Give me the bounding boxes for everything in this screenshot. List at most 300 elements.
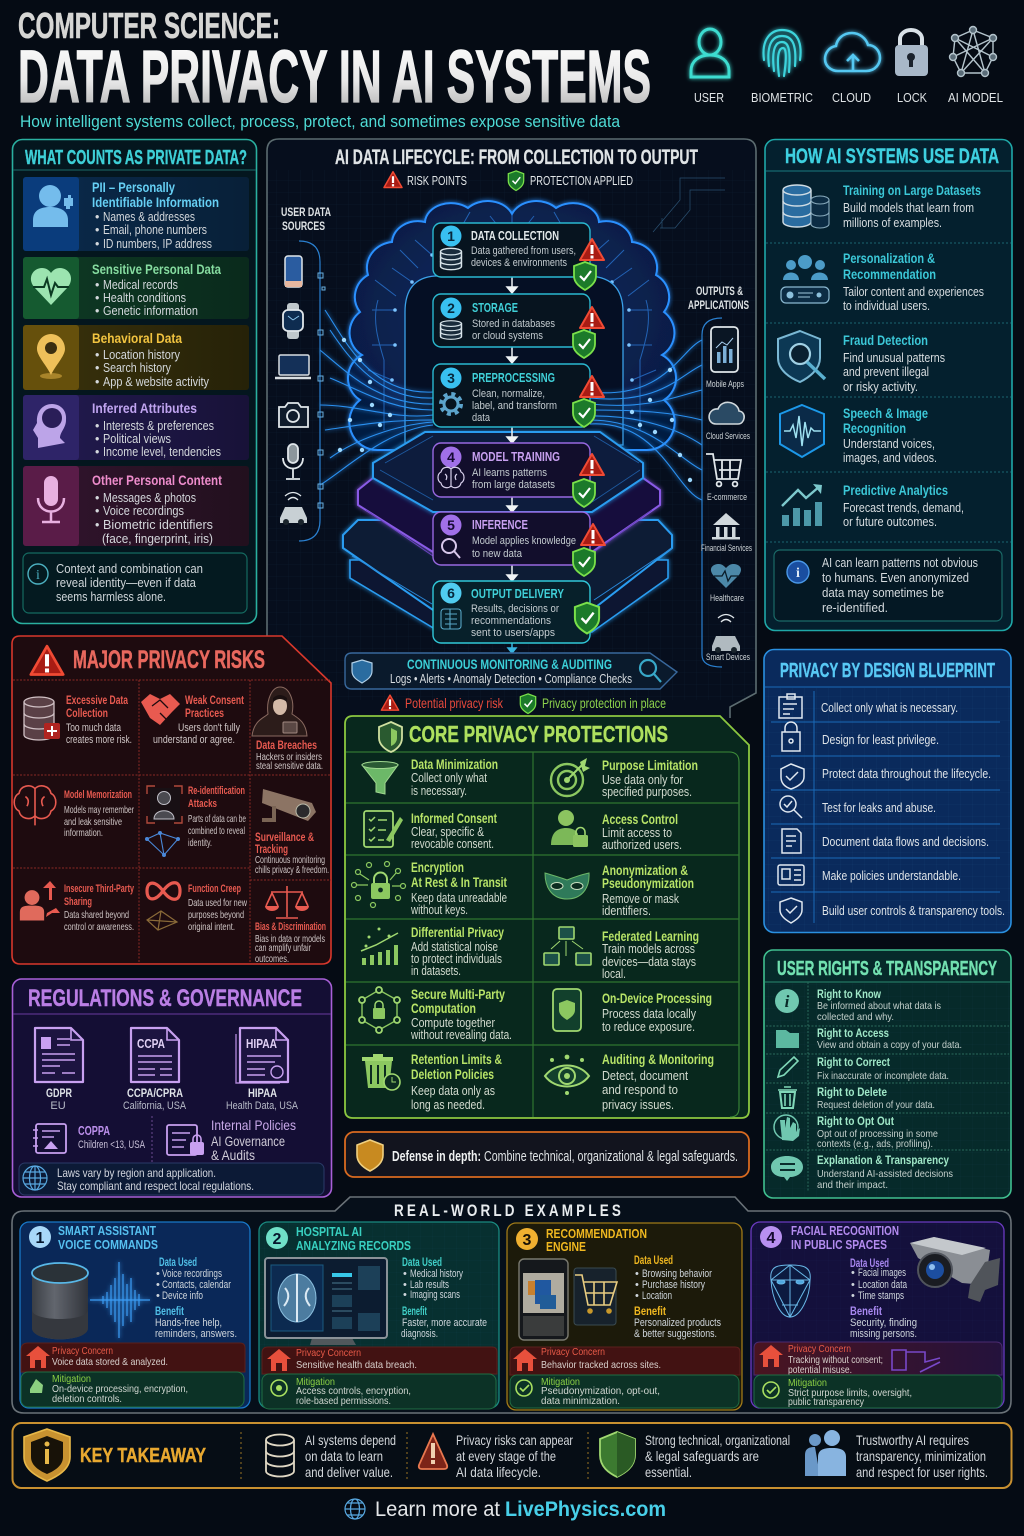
- step 3: preprocessing: [433, 364, 604, 427]
- callout: context and combination: [23, 553, 247, 613]
- card 4: facial recognition: 4: [767, 1230, 776, 1247]
- card 3: recommendation engine: RECOMMENDATION: [546, 1226, 647, 1241]
- row: PII: Identifiable Information: [92, 194, 219, 210]
- note: laws vary by region: [19, 1163, 324, 1195]
- cell: re-identification attacks: identity.: [188, 837, 212, 849]
- cell: function creep: [147, 883, 247, 933]
- card 1: smart assistant: VOICE COMMANDS: [58, 1237, 158, 1252]
- icon: microphone: [283, 444, 303, 479]
- takeaway: data: [266, 1432, 396, 1480]
- card 4: facial recognition: [751, 1222, 1004, 1408]
- step 2: storage: Stored in databases: [472, 318, 555, 330]
- row: PII: Names & addresses: [103, 210, 195, 224]
- callout: AI can learn patterns: AI can learn patterns not obvious: [822, 555, 978, 570]
- mitigation: Mitigation: [52, 1374, 91, 1385]
- concern: Privacy Concern: [788, 1344, 851, 1355]
- icon: financial services: [712, 513, 740, 540]
- chart: brain and server stack illustration: [320, 178, 725, 632]
- concern: [262, 1347, 497, 1374]
- item: predictive analytics: Predictive Analytics: [843, 483, 948, 498]
- panel: how AI systems use data: [765, 140, 1012, 630]
- step 2: storage: or cloud systems: [472, 330, 543, 342]
- item: on-device processing: [553, 989, 712, 1034]
- icon: microphone: [38, 476, 64, 522]
- note: laws vary by region: Stay compliant and respect local regulations.: [57, 1179, 254, 1193]
- row: other personal content: Biometric identifiers: [103, 518, 213, 532]
- row: PII: •: [95, 223, 99, 237]
- note: laws vary by region: Laws vary by region and application.: [57, 1166, 216, 1180]
- row: PII: ID numbers, IP address: [103, 237, 212, 251]
- card 2: hospital AI: [259, 1222, 499, 1409]
- icon: watch: [283, 303, 303, 339]
- row: behavioral data: Behavioral Data: [92, 330, 182, 346]
- right to delete: [778, 1085, 935, 1111]
- item: secure multi-party computation: [359, 987, 512, 1042]
- mitigation: Mitigation: [296, 1377, 335, 1388]
- row: behavioral data: Location history: [103, 348, 181, 362]
- card 1: smart assistant: Benefit: [155, 1304, 184, 1318]
- panel: AI data lifecycle: [267, 139, 756, 720]
- circuit traces top right: [653, 178, 725, 232]
- item: fraud detection: and prevent illegal: [843, 365, 929, 379]
- card 1: smart assistant: Contacts, calendar: [162, 1279, 231, 1291]
- callout: context and combination: seems harmless alone.: [56, 589, 166, 604]
- takeaway: risk: AI data lifecycle.: [456, 1464, 541, 1480]
- row: behavioral data: •: [95, 375, 99, 389]
- cell: insecure third-party sharing: Sharing: [64, 896, 92, 908]
- outputs and applications column: E-commerce: [707, 492, 747, 502]
- item: encryption: [352, 860, 507, 917]
- card 4: facial recognition: Security, finding: [850, 1317, 917, 1329]
- step 4: model training: 4: [447, 449, 455, 465]
- icon labels: CLOUD: [832, 90, 871, 105]
- callout: AI can learn patterns: re-identified.: [822, 600, 888, 615]
- step 6: output delivery: 6: [447, 585, 455, 601]
- icon labels: BIOMETRIC: [751, 90, 813, 105]
- takeaway: safeguards: [600, 1432, 790, 1480]
- card 3: recommendation engine: Purchase history: [642, 1279, 705, 1291]
- item: fraud detection: or risky activity.: [843, 380, 918, 394]
- blueprint list: Test for leaks and abuse.: [822, 800, 936, 815]
- outputs and applications column: Cloud Services: [706, 431, 750, 441]
- heading: REAL-WORLD EXAMPLES: [394, 1201, 624, 1220]
- row: behavioral data: •: [95, 348, 99, 362]
- takeaway: data: AI systems depend: [305, 1432, 396, 1448]
- icon: camera: [279, 403, 308, 427]
- outputs and applications column: Healthcare: [710, 593, 744, 603]
- legend: potential risk and protection: Privacy protection in place: [542, 695, 666, 711]
- card 2: hospital AI: •: [403, 1268, 407, 1280]
- cell: surveillance and tracking: Surveillance &: [255, 832, 314, 844]
- cell: excessive data collection: Collection: [66, 708, 108, 720]
- legend: potential risk and protection: [381, 694, 666, 714]
- icon: lock: [895, 30, 928, 76]
- explanation and transparency: and their impact.: [817, 1179, 888, 1191]
- header title block: [18, 5, 651, 131]
- step 2: storage: STORAGE: [472, 300, 518, 315]
- icon: biometric: [763, 30, 801, 76]
- card 4: facial recognition: FACIAL RECOGNITION: [791, 1223, 899, 1238]
- right to delete: Right to Delete: [817, 1085, 887, 1099]
- card 3: recommendation engine: Benefit: [634, 1304, 666, 1318]
- heading: KEY TAKEAWAY: [80, 1445, 207, 1467]
- item: speech and image recognition: images, and videos.: [843, 451, 937, 465]
- data wires right: [590, 340, 702, 500]
- callout: context and combination: i: [36, 568, 40, 583]
- icon: warning: [31, 646, 63, 674]
- item: purpose limitation: specified purposes.: [602, 785, 692, 799]
- item: speech and image recognition: Recognition: [843, 421, 906, 436]
- callout: AI can learn patterns: data may sometimes be: [822, 585, 944, 600]
- outputs and applications column: Financial Services: [701, 543, 752, 553]
- row: sensitive personal data: [23, 257, 249, 319]
- concern: Behavior tracked across sites.: [541, 1359, 661, 1371]
- item: secure multi-party computation: Compute together: [411, 1016, 495, 1030]
- row: other personal content: •: [95, 491, 99, 505]
- step 4: model training: [433, 443, 604, 507]
- data points: [338, 338, 692, 482]
- icon: smart speaker: [32, 1263, 88, 1339]
- step 5: inference: [433, 512, 605, 576]
- right to know: [775, 987, 941, 1023]
- card 3: recommendation engine: •: [635, 1268, 639, 1280]
- blueprint list: Document data flows and decisions.: [822, 834, 989, 849]
- takeaway: safeguards: essential.: [645, 1464, 692, 1480]
- card 1: smart assistant: reminders, answers.: [155, 1328, 237, 1340]
- outputs and applications column: Smart Devices: [706, 652, 750, 662]
- icon: healthcare: [711, 564, 741, 588]
- data wires left: [320, 310, 433, 485]
- inner brain folds: [368, 212, 656, 430]
- item: secure multi-party computation: Secure Multi-Party: [411, 987, 505, 1002]
- item: access control: [551, 810, 682, 852]
- internal policies: Internal Policies: [211, 1117, 296, 1133]
- banner: continuous monitoring: Logs • Alerts • Anomaly Detection • Compliance Checks: [390, 672, 632, 686]
- cell: bias and discrimination: [255, 886, 326, 965]
- card 1: smart assistant: SMART ASSISTANT: [58, 1223, 156, 1238]
- icon: phone and cart: [519, 1259, 617, 1340]
- cell: data breaches: [252, 687, 323, 772]
- row: inferred attributes: •: [95, 432, 99, 446]
- cell: excessive data collection: creates more risk.: [66, 734, 132, 746]
- footer: learn more: Learn more at: [375, 1498, 500, 1521]
- banner: continuous monitoring: [345, 653, 677, 689]
- regulation: GDPR: GDPR: [46, 1086, 72, 1100]
- callout: AI can learn patterns: to humans. Even anonymized: [822, 570, 969, 585]
- cell: data breaches: Hackers or insiders: [256, 752, 322, 763]
- icon: heart: [31, 268, 71, 305]
- right to know: Be informed about what data is: [817, 1000, 941, 1012]
- cell: insecure third-party sharing: Data shared beyond: [64, 909, 129, 921]
- card 3: recommendation engine: Location: [642, 1290, 672, 1302]
- cell: bias and discrimination: Bias & Discrimination: [255, 921, 326, 933]
- mitigation: Mitigation: [788, 1378, 827, 1389]
- panel: core privacy protections: [345, 716, 749, 1118]
- item: training: Training on Large Datasets: [843, 183, 981, 198]
- cell: bias and discrimination: Bias in data or models: [255, 934, 325, 945]
- regulation: CCPA: CCPA: [137, 1036, 165, 1051]
- item: speech and image recognition: Speech & Image: [843, 406, 928, 421]
- callout: context and combination: reveal identity—even if data: [56, 575, 197, 590]
- item: anonymization: Anonymization &: [602, 863, 688, 878]
- card 1: smart assistant: Hands-free help,: [155, 1317, 222, 1329]
- heading: CORE PRIVACY PROTECTIONS: [409, 721, 668, 747]
- card 4: facial recognition: •: [851, 1290, 855, 1302]
- item: informed consent: [364, 811, 497, 851]
- server layer top: [373, 432, 643, 512]
- row: inferred attributes: •: [95, 419, 99, 433]
- heading: WHAT COUNTS AS PRIVATE DATA?: [25, 147, 247, 169]
- row: behavioral data: •: [95, 361, 99, 375]
- cell: surveillance and tracking: [255, 789, 329, 876]
- row: PII: [23, 177, 249, 251]
- step 3: preprocessing: label, and transform: [472, 400, 557, 412]
- callout: AI can learn patterns: i: [796, 566, 800, 581]
- item: purpose limitation: [551, 758, 698, 799]
- row: behavioral data: App & website activity: [103, 375, 210, 389]
- icon: smart devices: [712, 614, 740, 653]
- card 3: recommendation engine: Data Used: [634, 1253, 673, 1267]
- regulation: HIPAA: HIPAA: [248, 1086, 277, 1100]
- item: fraud detection: Find unusual patterns: [843, 351, 945, 365]
- row: PII: •: [95, 237, 99, 251]
- item: training: [783, 183, 981, 230]
- item: access control: Limit access to: [602, 826, 672, 840]
- footer: learn more: LivePhysics.com: [505, 1498, 666, 1521]
- takeaway: safeguards: Strong technical, organizational: [645, 1432, 790, 1448]
- item: encryption: without keys.: [410, 903, 468, 917]
- card 1: smart assistant: [20, 1222, 250, 1408]
- icon: mobile apps: [711, 327, 738, 372]
- step 1: data collection: devices & environments: [471, 257, 567, 269]
- item: federated learning: devices—data stays: [602, 955, 696, 969]
- cell: bias and discrimination: outcomes.: [255, 954, 289, 965]
- row: other personal content: Other Personal Content: [92, 472, 222, 488]
- panel: what counts as private data: [12, 140, 256, 624]
- item: anonymization: identifiers.: [602, 904, 651, 918]
- row: inferred attributes: •: [95, 445, 99, 459]
- card 1: smart assistant: 1: [36, 1230, 45, 1247]
- item: personalization: to individual users.: [843, 299, 930, 313]
- item: purpose limitation: Use data only for: [602, 773, 683, 787]
- mitigation: Access controls, encryption,: [296, 1386, 411, 1397]
- right to opt out: contexts (e.g., ads, profiling).: [817, 1138, 933, 1150]
- item: data minimization: [362, 757, 498, 798]
- cell: model memorization: Model Memorization: [64, 789, 132, 801]
- card 3: recommendation engine: •: [635, 1290, 639, 1302]
- right to opt out: Right to Opt Out: [817, 1114, 894, 1128]
- takeaway: risk: Privacy risks can appear: [456, 1432, 573, 1448]
- row: inferred attributes: [23, 395, 249, 460]
- outputs and applications column: APPLICATIONS: [688, 298, 749, 312]
- regulation: HIPAA: Health Data, USA: [226, 1100, 299, 1112]
- callout: AI can learn patterns: [774, 550, 1002, 621]
- row: sensitive personal data: Medical records: [103, 278, 178, 292]
- item: differential privacy: Differential Privacy: [411, 925, 504, 940]
- subtitle: How intelligent systems collect, process, protect, and sometimes expose sensitive data: [20, 112, 620, 131]
- row: inferred attributes: Interests & preferences: [103, 419, 214, 433]
- callout: context and combination: Context and combination can: [56, 561, 203, 576]
- cell: excessive data collection: Too much data: [66, 722, 122, 734]
- banner: defense in depth: [345, 1132, 749, 1177]
- icon: head with brain: [33, 404, 66, 448]
- icon: location pin: [37, 334, 65, 379]
- item: on-device processing: On-Device Processing: [602, 991, 712, 1006]
- heading: AI DATA LIFECYCLE: FROM COLLECTION TO OUTPUT: [335, 146, 698, 169]
- icon: face mesh: [771, 1265, 810, 1317]
- blueprint list: Make policies understandable.: [822, 868, 961, 883]
- cell: re-identification attacks: Re-identification: [188, 785, 245, 797]
- step 5: inference: Model applies knowledge: [472, 535, 576, 547]
- right to delete: Request deletion of your data.: [817, 1099, 935, 1111]
- step 2: storage: [433, 294, 604, 358]
- row: other personal content: Messages & photos: [103, 491, 196, 505]
- cell: function creep: Function Creep: [188, 883, 241, 895]
- panel: real-world examples: [12, 1197, 1011, 1413]
- card 3: recommendation engine: & better suggestions.: [634, 1328, 717, 1340]
- icon: connected car: [280, 492, 307, 525]
- item: purpose limitation: Purpose Limitation: [602, 758, 698, 773]
- cell: weak consent: understand or agree.: [153, 734, 235, 746]
- item: retention limits: [362, 1052, 502, 1112]
- item: informed consent: revocable consent.: [411, 837, 494, 851]
- mitigation: [754, 1375, 1002, 1408]
- step 2: storage: 2: [447, 300, 455, 316]
- concern: Privacy Concern: [296, 1347, 361, 1359]
- right to know: Right to Know: [817, 987, 882, 1001]
- legend: risk and protection: RISK POINTS: [407, 174, 467, 188]
- concern: [21, 1343, 245, 1372]
- item: predictive analytics: [782, 483, 964, 529]
- item: predictive analytics: or future outcomes.: [843, 515, 937, 529]
- row: inferred attributes: Income level, tendencies: [103, 445, 221, 459]
- icon labels: [694, 90, 1003, 105]
- item: on-device processing: to reduce exposure.: [602, 1020, 695, 1034]
- banner: defense in depth: Combine technical, organizational & legal safeguards.: [484, 1148, 738, 1165]
- concern: [754, 1342, 1002, 1376]
- card 2: hospital AI: Medical history: [410, 1268, 463, 1280]
- step 3: preprocessing: Clean, normalize,: [472, 388, 545, 400]
- cell: weak consent: Weak Consent: [185, 695, 244, 707]
- mitigation: Strict purpose limits, oversight,: [788, 1388, 912, 1399]
- mitigation: [510, 1375, 739, 1408]
- concern: Voice data stored & analyzed.: [52, 1356, 168, 1368]
- row: other personal content: •: [95, 518, 99, 532]
- takeaway: trust: transparency, minimization: [856, 1448, 986, 1464]
- card 1: smart assistant: Device info: [162, 1290, 203, 1302]
- item: federated learning: Train models across: [602, 942, 695, 956]
- cell: model memorization: Models may remember: [64, 804, 134, 816]
- regulation: COPPA: COPPA: [78, 1124, 110, 1138]
- step 6: output delivery: sent to users/apps: [471, 627, 555, 639]
- takeaway: trust: and respect for user rights.: [856, 1464, 988, 1480]
- cell: weak consent: Users don't fully: [178, 722, 240, 734]
- item: informed consent: Clear, specific &: [411, 825, 485, 839]
- card 2: hospital AI: 2: [273, 1231, 282, 1248]
- takeaway: risk: [419, 1432, 573, 1480]
- right to correct: Right to Correct: [817, 1055, 890, 1069]
- item: retention limits: Retention Limits &: [411, 1052, 502, 1067]
- takeaway: data: on data to learn: [305, 1448, 383, 1464]
- outputs and applications column: OUTPUTS &: [696, 284, 743, 298]
- takeaway: risk: at every stage of the: [456, 1448, 556, 1464]
- concern: Tracking without consent;: [788, 1355, 883, 1366]
- card 3: recommendation engine: •: [635, 1279, 639, 1291]
- cell: model memorization: [14, 786, 134, 839]
- cell: bias and discrimination: can amplify unfair: [255, 943, 311, 954]
- explanation and transparency: [771, 1153, 953, 1191]
- card 4: facial recognition: Time stamps: [858, 1290, 904, 1302]
- item: differential privacy: in datasets.: [411, 964, 461, 978]
- step 6: output delivery: recommendations: [471, 615, 551, 627]
- row: inferred attributes: Political views: [103, 432, 171, 446]
- item: auditing and monitoring: Auditing & Monitoring: [602, 1052, 714, 1067]
- kicker: computer science: COMPUTER SCIENCE:: [18, 5, 280, 46]
- card 3: recommendation engine: Browsing behavior: [642, 1268, 712, 1280]
- mitigation: On-device processing, encryption,: [52, 1384, 188, 1395]
- icon: surveillance camera: [910, 1237, 1000, 1302]
- item: federated learning: local.: [602, 967, 626, 981]
- cell: excessive data collection: Excessive Data: [66, 695, 128, 707]
- cell: model memorization: information.: [64, 827, 103, 839]
- internal policies: AI Governance: [211, 1133, 285, 1149]
- card 4: facial recognition: Data Used: [850, 1256, 889, 1270]
- item: auditing and monitoring: and respond to: [602, 1083, 678, 1097]
- footer: learn more: [345, 1498, 666, 1521]
- right to opt out: Opt out of processing in some: [817, 1128, 938, 1140]
- item: auditing and monitoring: Detect, document: [602, 1069, 688, 1083]
- cell: surveillance and tracking: chills privacy & freedom.: [255, 865, 329, 876]
- icon: phone: [285, 256, 302, 287]
- card 2: hospital AI: •: [403, 1289, 407, 1301]
- card 1: smart assistant: •: [156, 1279, 160, 1291]
- icon: e-commerce cart: [706, 454, 741, 486]
- item: fraud detection: Fraud Detection: [843, 333, 928, 348]
- icon labels: AI MODEL: [948, 90, 1003, 105]
- step 5: inference: INFERENCE: [472, 517, 528, 532]
- row: other personal content: (face, fingerprint, iris): [102, 532, 213, 546]
- takeaway: data: and deliver value.: [305, 1464, 393, 1480]
- card 4: facial recognition: •: [851, 1279, 855, 1291]
- right to know: collected and why.: [817, 1011, 894, 1023]
- item: data minimization: Collect only what: [411, 771, 487, 785]
- user data sources column: SOURCES: [282, 219, 325, 233]
- item: federated learning: Federated Learning: [602, 929, 699, 944]
- cell: function creep: Data used for new: [188, 897, 247, 909]
- row: sensitive personal data: •: [95, 291, 99, 305]
- card 2: hospital AI: HOSPITAL AI: [296, 1224, 362, 1239]
- cell: insecure third-party sharing: [20, 881, 135, 933]
- item: auditing and monitoring: privacy issues.: [602, 1098, 674, 1112]
- item: informed consent: Informed Consent: [411, 811, 497, 826]
- item: on-device processing: Process data locally: [602, 1007, 697, 1021]
- right to correct: Fix inaccurate or incomplete data.: [817, 1070, 949, 1082]
- card 4: facial recognition: •: [851, 1267, 855, 1279]
- row: sensitive personal data: •: [95, 304, 99, 318]
- cell: re-identification attacks: Parts of data can be: [188, 813, 246, 825]
- right to correct: [778, 1055, 949, 1082]
- item: federated learning: [544, 927, 699, 981]
- inner arch: [405, 276, 623, 445]
- cell: weak consent: [141, 694, 244, 746]
- item: data minimization: is necessary.: [411, 784, 467, 798]
- card 2: hospital AI: diagnosis.: [401, 1328, 438, 1340]
- explanation and transparency: Understand AI-assisted decisions: [817, 1168, 953, 1180]
- item: access control: authorized users.: [602, 838, 682, 852]
- step 1: data collection: Data gathered from users,: [471, 245, 576, 257]
- item: speech and image recognition: [780, 405, 937, 465]
- step 4: model training: from large datasets: [472, 479, 555, 491]
